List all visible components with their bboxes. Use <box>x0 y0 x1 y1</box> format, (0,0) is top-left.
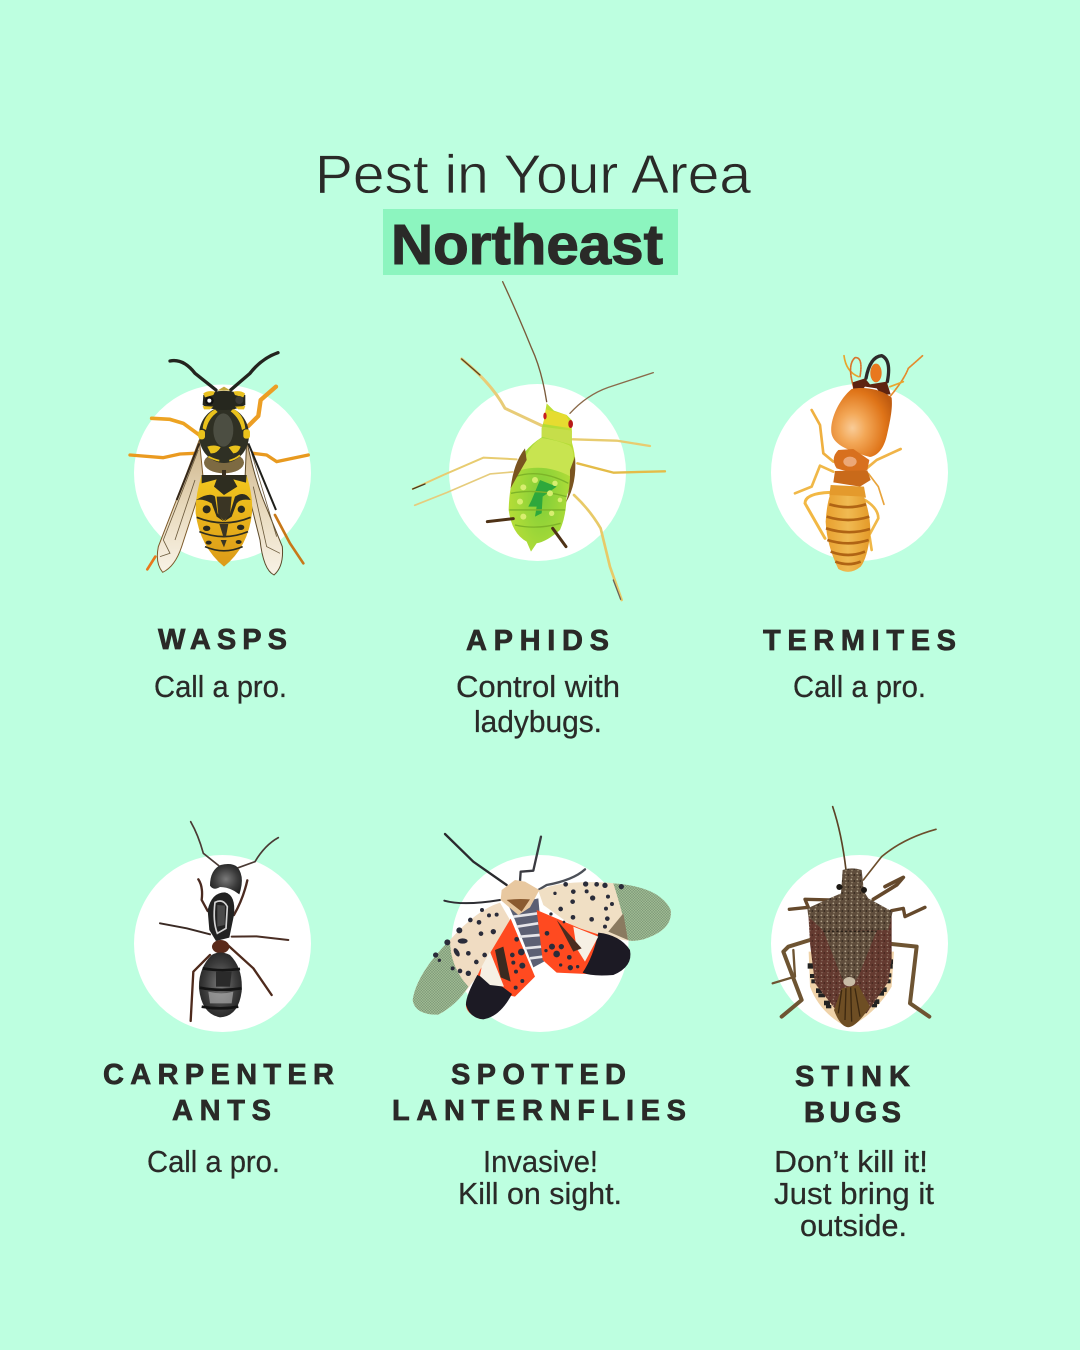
label: wasps: WASPS <box>158 624 287 656</box>
label: aphids: APHIDS <box>466 625 609 657</box>
label: carpenter ants: CARPENTER <box>103 1059 334 1091</box>
panel: wasps <box>130 353 311 704</box>
panel: spotted lanternflies <box>392 834 686 1211</box>
termite circle <box>771 384 948 561</box>
panel: aphids <box>413 282 665 739</box>
advice: stink bugs: Don’t kill it! <box>774 1144 928 1179</box>
label: stink bugs: STINK <box>795 1061 910 1093</box>
advice: wasps: Call a pro. <box>154 669 287 704</box>
label: termites: TERMITES <box>763 625 956 657</box>
label: stink bugs: BUGS <box>804 1097 901 1129</box>
advice: stink bugs: outside. <box>800 1208 907 1243</box>
region highlight: Northeast <box>391 213 663 277</box>
advice: aphids: Control with <box>456 669 620 704</box>
icon: aphid <box>413 282 665 600</box>
advice: spotted lanternflies: Invasive! <box>483 1144 598 1179</box>
left hindwing <box>466 919 535 1019</box>
icon: termite <box>795 356 923 572</box>
advice: termites: Call a pro. <box>793 669 926 704</box>
icon: lanternfly <box>413 834 671 1019</box>
icon: wasp <box>130 353 308 575</box>
aphid circle <box>449 384 626 561</box>
advice: carpenter ants: Call a pro. <box>147 1144 280 1179</box>
label: spotted lanternflies: LANTERNFLIES <box>392 1095 686 1127</box>
panel: termites <box>763 356 956 704</box>
icon: stink bug <box>773 807 936 1027</box>
lanternfly circle <box>452 855 628 1032</box>
label: carpenter ants: ANTS <box>172 1095 271 1127</box>
advice: spotted lanternflies: Kill on sight. <box>458 1176 622 1211</box>
advice: aphids: ladybugs. <box>474 704 602 739</box>
title: Pest in Your Area <box>315 143 751 205</box>
icon: ant <box>160 822 288 1021</box>
stink bug circle <box>771 855 948 1032</box>
label: spotted lanternflies: SPOTTED <box>451 1059 626 1091</box>
body <box>508 898 544 967</box>
right forewing <box>538 882 671 941</box>
panel: stink bugs <box>771 807 948 1243</box>
wasp circle <box>134 384 311 562</box>
advice: stink bugs: Just bring it <box>774 1176 934 1211</box>
ant circle <box>134 855 311 1032</box>
right hindwing <box>537 910 630 974</box>
left forewing <box>413 903 510 1015</box>
panel: carpenter ants <box>103 822 334 1179</box>
wasp waist <box>204 452 244 473</box>
